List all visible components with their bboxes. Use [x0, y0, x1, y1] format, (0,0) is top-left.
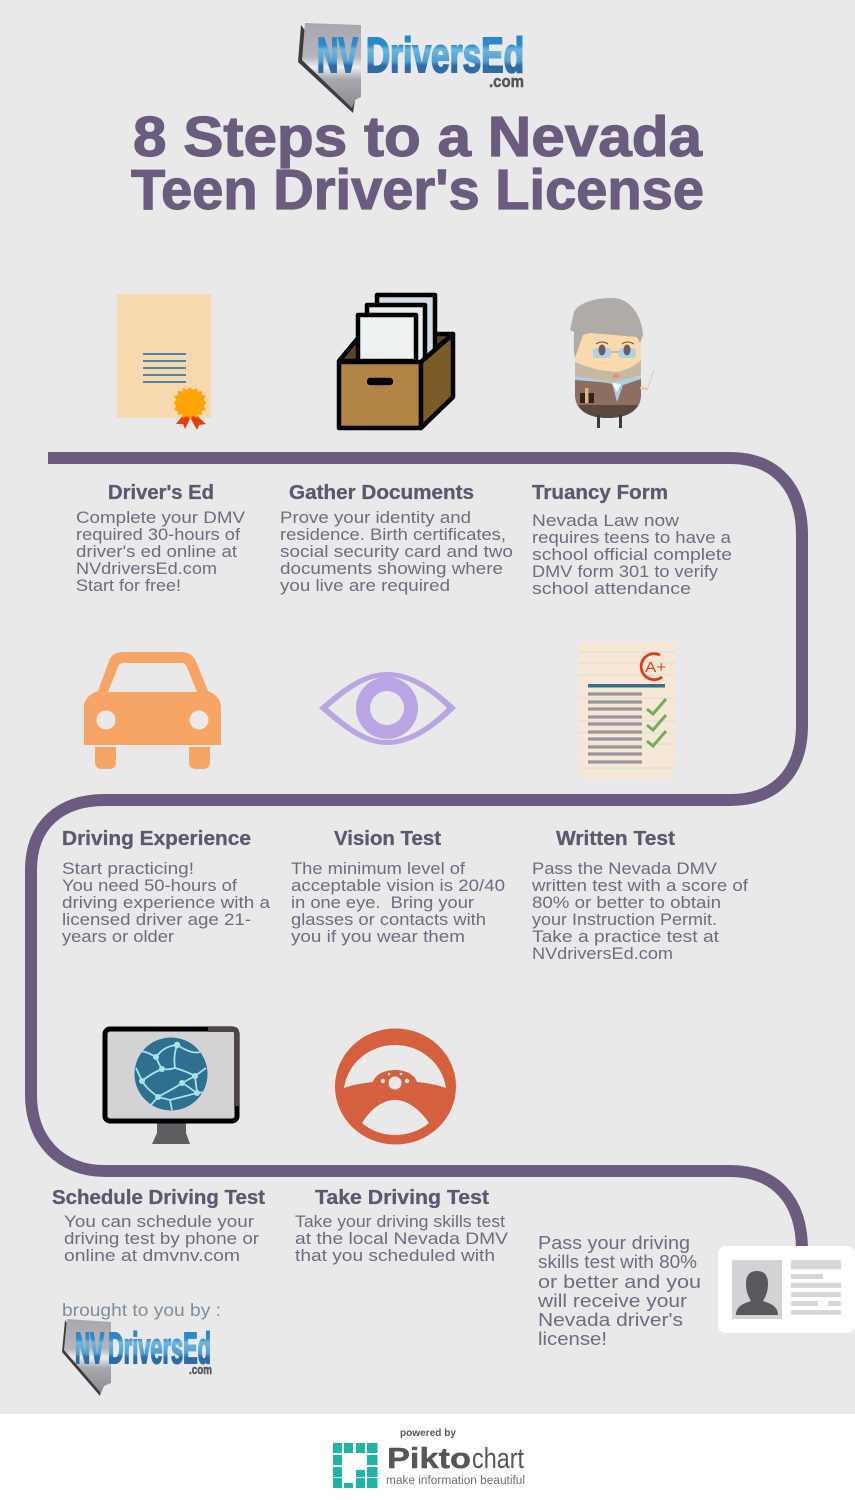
step 3 text: Nevada Law now	[532, 511, 680, 530]
step 5 text: in one eye. Bring your	[291, 893, 474, 912]
Piktochart wordmark: chart	[472, 1443, 524, 1475]
step 1 text: driver's ed online at	[76, 542, 237, 561]
logo: NV DriversEd footer	[62, 1319, 212, 1396]
step 4 text: licensed driver age 21-	[62, 910, 251, 929]
title: 8 Steps to a Nevada	[133, 105, 703, 169]
title	[131, 105, 704, 222]
logo: NV DriversEd header: DriversEd	[366, 29, 524, 83]
step 7 text: You can schedule your	[64, 1212, 254, 1231]
Piktochart logo mark	[333, 1443, 378, 1488]
step 7 text: online at dmvnv.com	[64, 1246, 240, 1265]
step 2 text: documents showing where	[280, 559, 503, 578]
icon: steering wheel	[335, 1028, 456, 1144]
logo: NV DriversEd footer: NV	[75, 1324, 104, 1373]
step 5 text: glasses or contacts with	[291, 910, 486, 929]
Piktochart wordmark	[387, 1443, 524, 1475]
step 6 text: 80% or better to obtain	[532, 893, 721, 912]
step 2 text: you live are required	[280, 576, 450, 595]
step 8 text	[295, 1212, 509, 1265]
icon: driver's license card	[718, 1246, 855, 1333]
step 6 text: your Instruction Permit.	[532, 910, 717, 929]
step 3 heading: Truancy Form	[532, 482, 668, 504]
step 4 text: You need 50-hours of	[62, 876, 237, 895]
step 5 heading: Vision Test	[334, 828, 441, 850]
icon: written test: A+	[645, 659, 666, 676]
final step text: skills test with 80%	[538, 1251, 697, 1272]
icon: document box	[339, 295, 453, 428]
step 5 text: The minimum level of	[291, 859, 465, 878]
logo: NV DriversEd footer: .com	[189, 1362, 212, 1377]
step 3 text: requires teens to have a	[532, 528, 732, 547]
final step text: Nevada driver's	[538, 1309, 683, 1330]
icon: eye	[319, 672, 456, 745]
logo: NV DriversEd header: .com	[489, 72, 524, 91]
step 6 text	[531, 859, 748, 963]
step 5 text: you if you wear them	[291, 927, 465, 946]
step 2 text: Prove your identity and	[280, 508, 471, 527]
step 6 text: written test with a score of	[531, 876, 748, 895]
icon: car	[84, 652, 221, 769]
step 2 text: social security card and two	[280, 542, 513, 561]
footer band	[0, 1414, 855, 1500]
step 6 text: Take a practice test at	[532, 927, 719, 946]
logo: NV DriversEd header	[298, 23, 524, 113]
step 1 text: required 30-hours of	[76, 525, 240, 544]
brought to you by label: brought to you by :	[62, 1300, 221, 1320]
logo: NV DriversEd footer: DriversEd	[108, 1324, 211, 1373]
step 8 text: that you scheduled with	[295, 1246, 495, 1265]
step 8 heading: Take Driving Test	[315, 1187, 489, 1209]
step 3 text: DMV form 301 to verify	[532, 562, 719, 581]
title: Teen Driver's License	[131, 158, 704, 222]
step 6 text: NVdriversEd.com	[532, 944, 673, 963]
icon: written test	[579, 642, 675, 778]
step 8 text: at the local Nevada DMV	[295, 1229, 509, 1248]
step 4 heading: Driving Experience	[62, 828, 251, 850]
step 3 text: school official complete	[532, 545, 732, 564]
step 7 heading: Schedule Driving Test	[52, 1187, 265, 1209]
step 6 heading: Written Test	[556, 828, 675, 850]
step 1 text: Complete your DMV	[76, 508, 246, 527]
step 8 text: Take your driving skills test	[295, 1212, 505, 1231]
step 1 text: Start for free!	[76, 576, 181, 595]
icon: certificate	[117, 294, 211, 430]
step 2 text: residence. Birth certificates,	[280, 525, 506, 544]
step 1 text: NVdriversEd.com	[76, 559, 217, 578]
step 3 text: school attendance	[532, 579, 691, 598]
final step text: license!	[538, 1328, 607, 1349]
step 4 text: driving experience with a	[62, 893, 271, 912]
step 1 heading: Driver's Ed	[108, 482, 214, 504]
step 6 text: Pass the Nevada DMV	[532, 859, 718, 878]
Piktochart wordmark: Pikto	[387, 1443, 471, 1475]
icon: computer monitor with globe	[105, 1027, 239, 1144]
powered by text: powered by	[400, 1427, 456, 1439]
step 1 text	[76, 508, 246, 595]
step 4 text: years or older	[62, 927, 174, 946]
icon: school official	[570, 298, 654, 428]
step 4 text	[62, 859, 271, 946]
final step text: Pass your driving	[538, 1232, 690, 1253]
final step text: will receive your	[537, 1290, 687, 1311]
step 3 text	[532, 511, 732, 598]
timeline path	[31, 458, 802, 1250]
final step text	[537, 1232, 701, 1349]
step 5 text	[291, 859, 505, 946]
logo: NV DriversEd header: NV	[317, 29, 358, 83]
step 5 text: acceptable vision is 20/40	[291, 876, 505, 895]
step 4 text: Start practicing!	[62, 859, 194, 878]
step 7 text	[64, 1212, 259, 1265]
Piktochart tagline: make information beautiful	[386, 1475, 525, 1487]
step 2 heading: Gather Documents	[289, 482, 474, 504]
step 7 text: driving test by phone or	[64, 1229, 259, 1248]
final step text: or better and you	[538, 1271, 701, 1292]
step 2 text	[280, 508, 513, 595]
